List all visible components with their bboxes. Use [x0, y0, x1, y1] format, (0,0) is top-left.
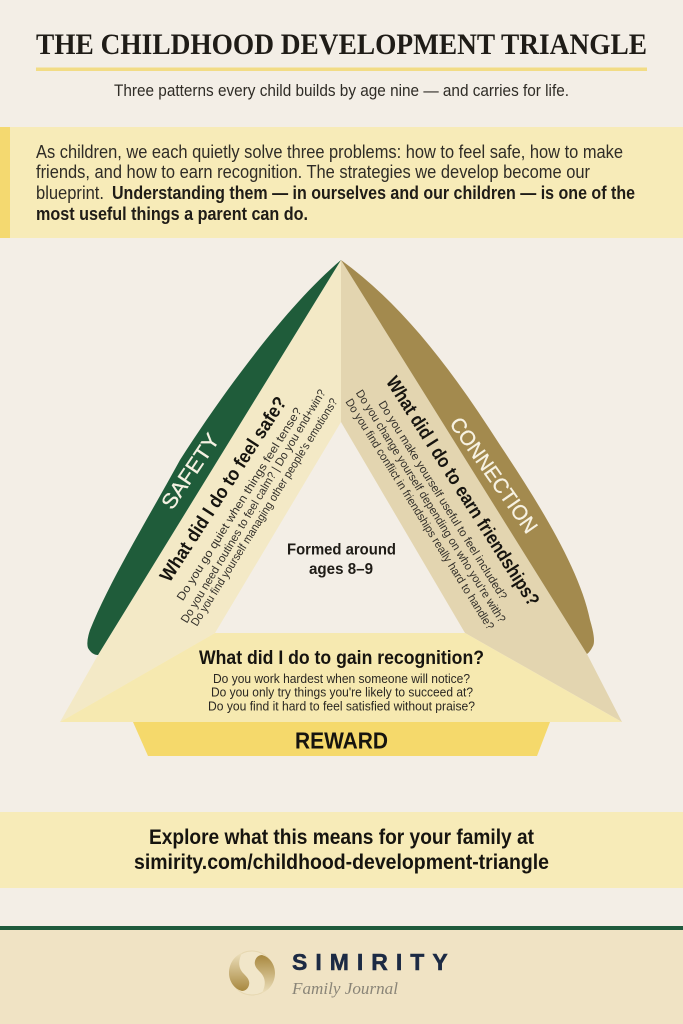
- panel: connection: [341, 260, 622, 722]
- safety questions: Do you find yourself managing other people's emotions?: [189, 397, 340, 628]
- intro text: friends, and how to earn recognition. The strategies we develop become our: [36, 162, 590, 182]
- reward band: [133, 722, 550, 756]
- connection questions: Do you find conflict in friendships really hard to handle?: [343, 397, 496, 632]
- call to action text: [134, 826, 549, 874]
- brand name: SIMIRITY: [292, 949, 456, 975]
- reward heading: What did I do to gain recognition?: [199, 648, 484, 669]
- connection questions: Do you change yourself depending on who you're with?: [353, 388, 507, 625]
- reward questions: Do you only try things you're likely to succeed at?: [211, 684, 473, 700]
- connection heading: What did I do to earn friendships?: [381, 373, 543, 610]
- subtitle: Three patterns every child builds by age nine — and carries for life.: [114, 81, 569, 100]
- intro text: blueprint.: [36, 183, 104, 203]
- intro text: [36, 142, 635, 224]
- intro text: most useful things a parent can do.: [36, 204, 308, 224]
- center caption: ages 8–9: [309, 561, 373, 578]
- connection band: [341, 260, 594, 654]
- intro text: Understanding them — in ourselves and our children — is one of the: [112, 183, 635, 203]
- center caption: Formed around: [287, 542, 396, 558]
- reward label: REWARD: [295, 728, 388, 754]
- safety band: [87, 260, 341, 655]
- safety label: SAFETY: [157, 429, 224, 514]
- title underline: [36, 68, 647, 71]
- safety questions: Do you need routines to feel calm? | Do you end+win?: [179, 388, 329, 625]
- call to action text: Explore what this means for your family at: [149, 826, 534, 849]
- reward questions: Do you find it hard to feel satisfied without praise?: [208, 698, 475, 714]
- safety questions: Do you go quiet when things feel tense?: [175, 406, 305, 603]
- connection questions: Do you make yourself useful to feel included?: [376, 399, 509, 602]
- panel: footer: [0, 926, 683, 1024]
- panel: intro: [0, 127, 683, 238]
- safety heading: What did I do to feel safe?: [156, 393, 291, 586]
- call to action text: simirity.com/childhood-development-triangle: [134, 851, 549, 874]
- intro text: As children, we each quietly solve three problems: how to feel safe, how to make: [36, 142, 623, 162]
- reward questions: [208, 671, 475, 714]
- brand tagline: Family Journal: [291, 979, 398, 998]
- panel: call to action: [0, 812, 683, 888]
- triangle diagram: [60, 260, 622, 756]
- reward questions: Do you work hardest when someone will notice?: [213, 671, 470, 686]
- panel: reward: [60, 633, 622, 756]
- panel: safety: [60, 260, 341, 722]
- icon: logo: [229, 951, 275, 995]
- center caption: [287, 542, 396, 578]
- connection label: CONNECTION: [445, 413, 542, 538]
